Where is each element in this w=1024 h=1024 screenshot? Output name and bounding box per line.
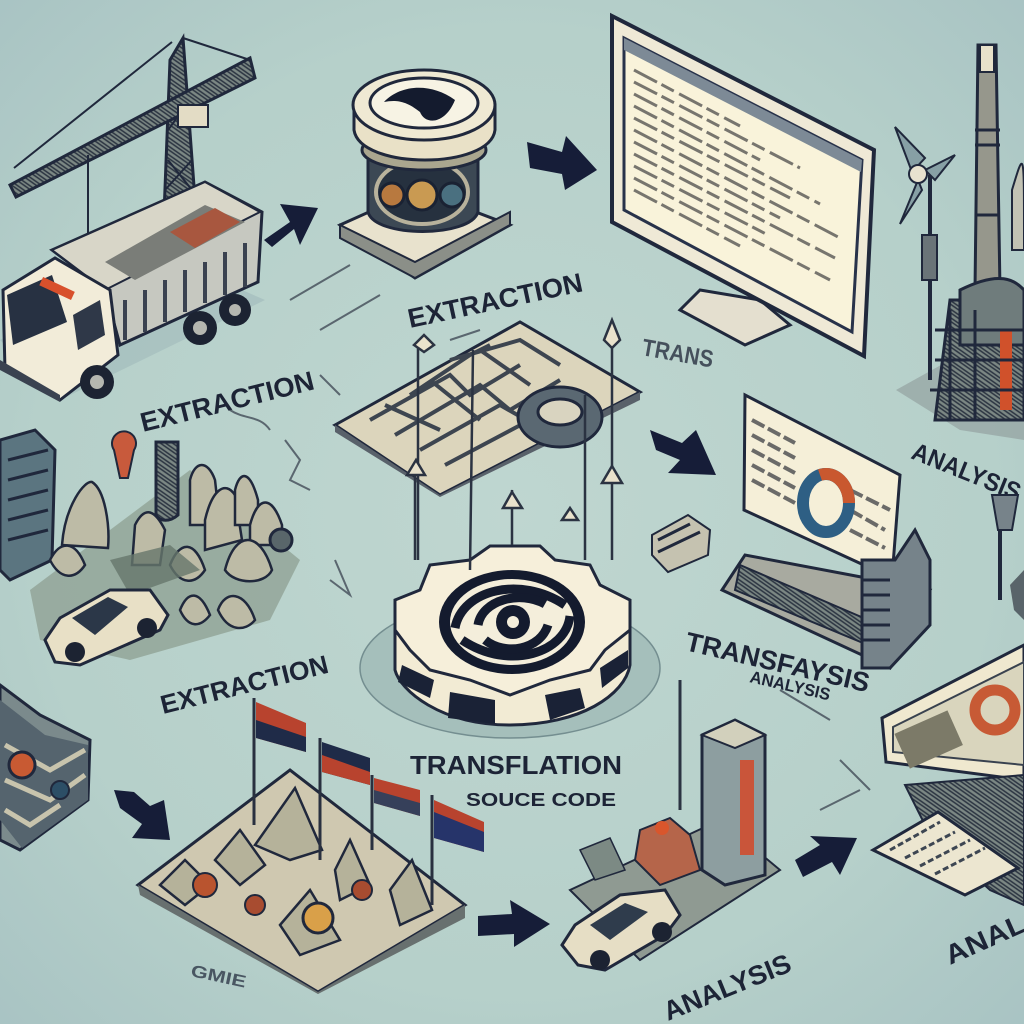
illustration: central gear: [360, 546, 660, 738]
truck cab: [3, 258, 118, 400]
illustration: refinery tower: [895, 45, 1024, 440]
arrow 1: [264, 204, 318, 247]
arrow 3: [650, 430, 716, 475]
car: [45, 590, 168, 665]
illustration: isometric box bottom-left: [0, 685, 90, 850]
arrow 5: [478, 900, 550, 947]
arrow 6: [795, 836, 857, 877]
wind turbine: [895, 127, 955, 380]
label: transfsis analysis: TRANSFAYSIS: [683, 627, 873, 698]
label: gmie: GMIE: [189, 961, 248, 992]
truck bed: [52, 182, 262, 345]
connector arrows above gear: [407, 320, 622, 570]
arrow 4: [114, 790, 170, 840]
flags: [254, 698, 484, 905]
label: source code: SOUCE CODE: [466, 790, 616, 810]
illustration: landscape with city and car: [0, 430, 300, 665]
illustration: large monitor: [612, 16, 874, 356]
illustration: ring device: [340, 70, 510, 278]
illustration: small server box: [652, 515, 710, 572]
car: [562, 890, 680, 970]
label: extraction (center): EXTRACTION: [405, 268, 585, 334]
label: transfsis analysis: ANALYSIS: [748, 667, 832, 704]
label: trans: TRANS: [640, 334, 716, 373]
illustration: terrain with flags: [138, 698, 484, 994]
illustration: monitor with dashboard: [722, 395, 930, 668]
crane: [10, 38, 255, 240]
illustration: circuit map: [335, 322, 640, 497]
label: transflation: TRANSFLATION: [410, 750, 622, 780]
scattered sketch marks: [230, 265, 870, 810]
illustration: pedestal on right edge: [992, 495, 1024, 620]
arrow 2: [527, 136, 597, 190]
label: extraction (left): EXTRACTION: [157, 649, 331, 720]
label: extraction (truck): EXTRACTION: [137, 366, 317, 438]
illustration: dashboard screen and laptop: [873, 645, 1024, 905]
illustration: tower and car: [562, 680, 780, 970]
label: analysis (bottom right): ANAL: [940, 909, 1024, 970]
wheels: [80, 294, 251, 399]
illustration: crane and dump truck: [0, 38, 265, 402]
